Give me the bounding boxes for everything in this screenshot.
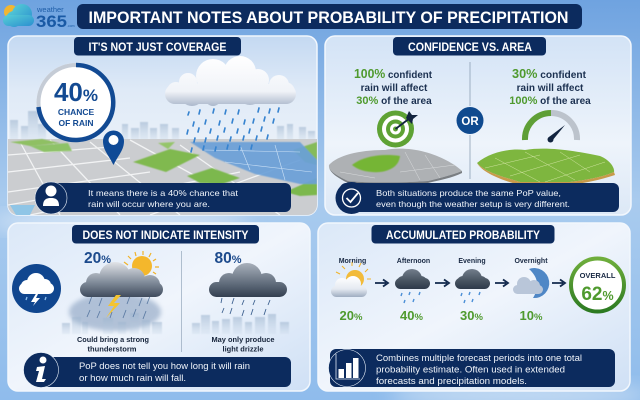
callout: combines periods: forecasts and precipitation models. <box>376 376 527 386</box>
callout: combines periods: Combines multiple forecast periods into one total <box>376 353 582 363</box>
logo: weather365 <box>3 4 75 31</box>
arrow <box>495 280 508 286</box>
period: evening <box>455 258 490 303</box>
heading: it's not just coverage <box>74 37 241 56</box>
text: could bring a strong thunderstorm: Could bring a strong <box>77 335 149 344</box>
callout: PoP limits <box>24 352 291 388</box>
arrow <box>375 280 388 286</box>
divider <box>180 251 182 352</box>
text: 100% confident: 100% confident <box>354 67 433 81</box>
icon: storm badge <box>12 264 61 313</box>
callout: PoP limits: PoP does not tell you how long it will rain <box>79 361 250 371</box>
callout: combines periods: probability estimate. Often used in extended <box>376 364 565 374</box>
period: morning: Morning <box>339 258 366 265</box>
text: 100% confident <box>354 67 433 107</box>
donut: 40% chance of rain: CHANCE <box>58 107 95 117</box>
badge: or: OR <box>461 116 479 128</box>
text: 30% confident <box>509 67 591 107</box>
badge: overall 62% <box>571 258 624 312</box>
text: 100% confident: 30% of the area <box>356 95 432 107</box>
period: evening: Evening <box>458 258 486 265</box>
text: 30% confident: 100% of the area <box>509 95 591 107</box>
badge: overall 62%: 62% <box>581 284 614 305</box>
icon: location pin <box>103 130 124 165</box>
illustration: drizzle cloud <box>192 263 289 334</box>
donut: 40% chance of rain: OF RAIN <box>59 118 93 128</box>
text: 20%: 20% <box>84 250 111 267</box>
callout: PoP limits: or how much rain will fall. <box>79 373 186 383</box>
logo: weather365: 365 <box>36 12 67 31</box>
illustration: white rain cloud <box>165 56 296 152</box>
callout: 40% chance <box>35 182 291 214</box>
callout: 40% chance: It means there is a 40% chance that <box>88 188 239 198</box>
panel: confidence vs. area <box>325 36 631 215</box>
period: morning <box>331 258 371 297</box>
heading: accumulated probability <box>372 225 554 244</box>
period: afternoon: Afternoon <box>397 258 430 265</box>
illustration: green land <box>477 149 615 185</box>
callout: same PoP value: even though the weather setup is very different. <box>376 199 570 209</box>
heading: it's not just coverage: IT'S NOT JUST COVERAGE <box>88 42 227 54</box>
callout: same PoP value: Both situations produce the same PoP value, <box>376 188 561 198</box>
text: may only produce light drizzle <box>212 335 274 354</box>
illustration: gray land with green patch <box>329 149 462 184</box>
period: overnight <box>513 258 549 298</box>
heading: does not indicate intensity: DOES NOT INDICATE INTENSITY <box>82 230 249 242</box>
text: 30% confident: rain will affect <box>517 83 584 94</box>
text: afternoon value: 40% <box>400 308 424 323</box>
panel: it's not just coverage <box>8 36 317 215</box>
period: overnight: Overnight <box>514 258 548 265</box>
heading: confidence vs. area: CONFIDENCE VS. AREA <box>408 42 532 54</box>
arrow <box>552 280 565 286</box>
city map illustration <box>8 111 317 215</box>
illustration: thunderstorm with sun <box>62 251 163 334</box>
heading: does not indicate intensity <box>72 225 259 244</box>
logo: weather365: weather <box>36 5 64 14</box>
callout: combines periods <box>328 349 615 387</box>
text: could bring a strong thunderstorm: thunderstorm <box>88 344 137 354</box>
donut: 40% chance of rain: 40% <box>54 77 98 107</box>
text: may only produce light drizzle: May only produce <box>212 335 274 344</box>
period: afternoon <box>395 258 430 303</box>
heading: confidence vs. area <box>393 37 546 56</box>
text: overnight value: 10% <box>520 308 543 323</box>
icon: target with dart <box>377 110 418 148</box>
arrow <box>435 280 449 286</box>
badge: or <box>456 107 484 134</box>
text: could bring a strong thunderstorm <box>77 335 149 354</box>
donut: 40% chance of rain <box>36 63 116 142</box>
text: 100% confident: rain will affect <box>361 83 428 94</box>
badge: overall 62%: OVERALL <box>580 271 616 280</box>
text: may only produce light drizzle: light drizzle <box>222 344 264 354</box>
callout: same PoP value <box>336 182 619 214</box>
panel: accumulated probability <box>318 223 630 391</box>
text: morning value: 20% <box>340 308 363 323</box>
callout: 40% chance: rain will occur where you are. <box>88 199 210 209</box>
icon: gauge <box>525 113 577 142</box>
logo: weather365: .com <box>67 24 75 28</box>
text: evening value: 30% <box>460 308 484 323</box>
panel: does not indicate intensity <box>8 223 310 391</box>
title banner: IMPORTANT NOTES ABOUT PROBABILITY OF PRECIPITATION <box>88 8 568 27</box>
heading: accumulated probability: ACCUMULATED PROBABILITY <box>386 230 540 242</box>
text: 30% confident: 30% confident <box>512 67 587 81</box>
divider <box>469 62 471 179</box>
text: 80%: 80% <box>214 250 242 267</box>
